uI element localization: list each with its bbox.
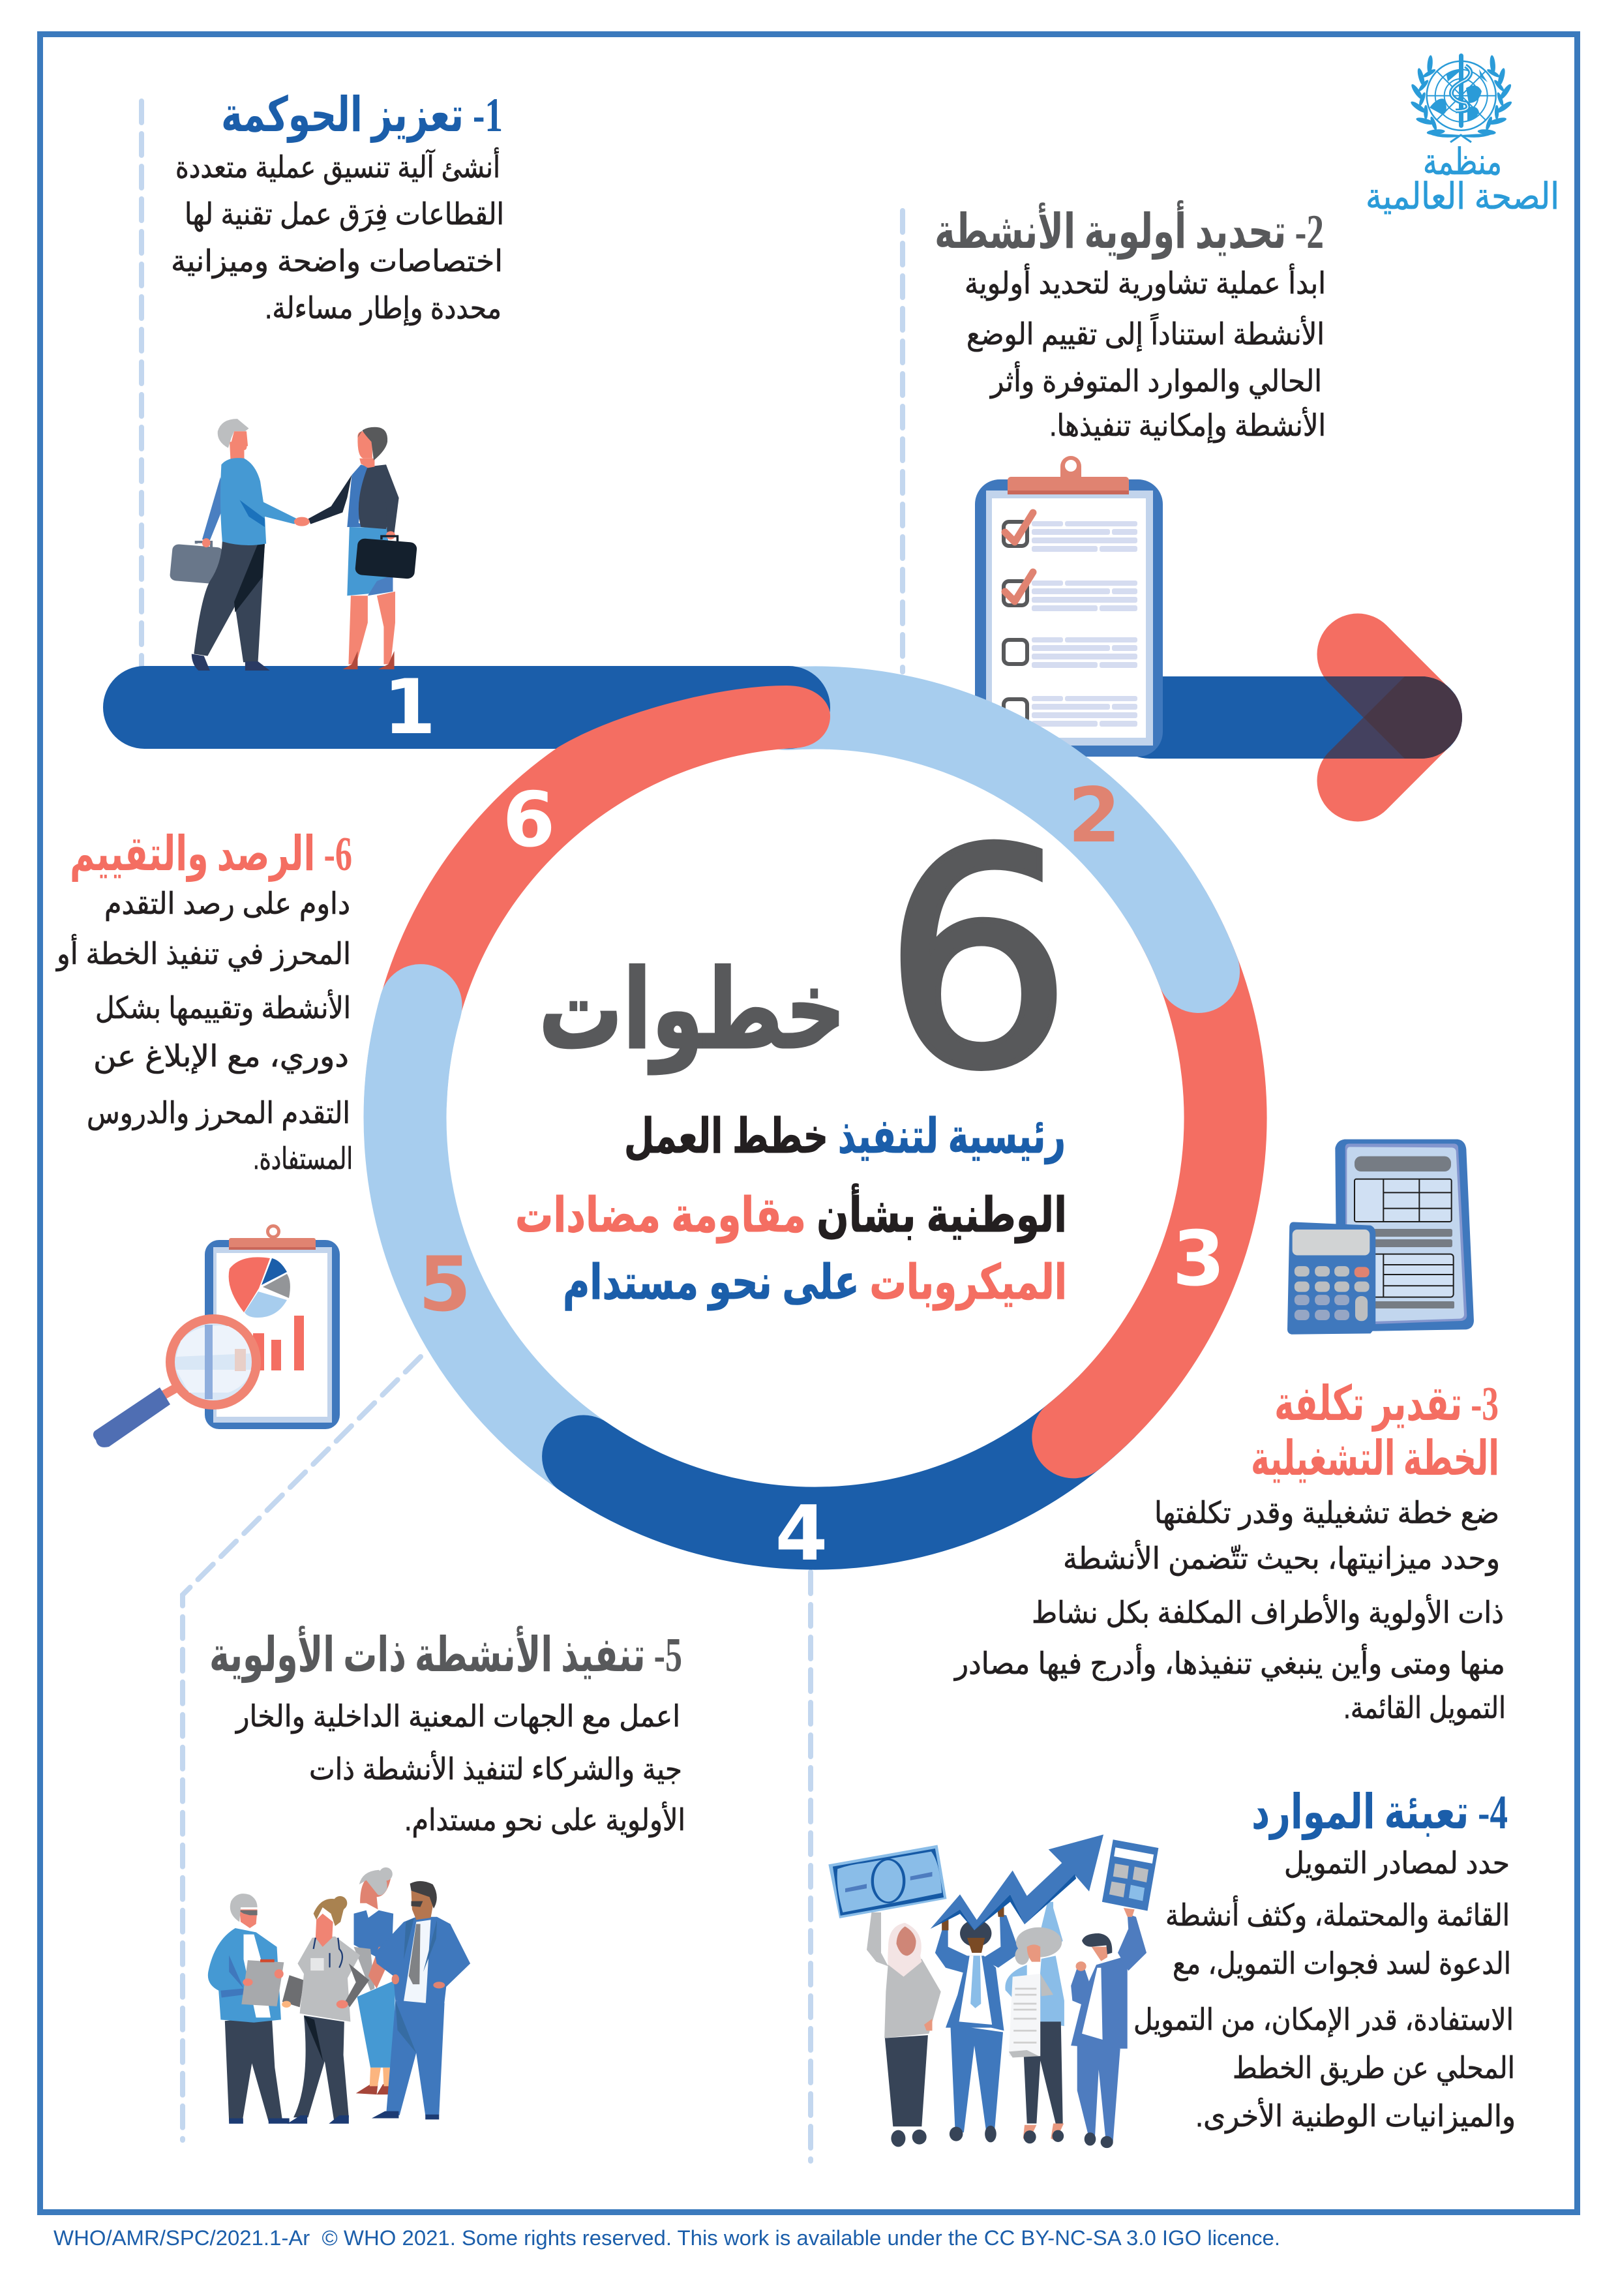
text step 4: القائمة والمحتملة، وكثف أنشطة xyxy=(1165,1896,1510,1933)
arrow head: chevron and shaft xyxy=(1109,654,1478,781)
circular ring with six segments xyxy=(103,666,1225,1528)
central title: word steps: خطوات xyxy=(539,948,846,1074)
text step 5: جية والشركاء لتنفيذ الأنشطة ذات xyxy=(309,1750,682,1787)
text step 2: الحالي والموارد المتوفرة وأثر xyxy=(989,361,1322,399)
text step 1: اختصاصات واضحة وميزانية xyxy=(171,244,503,279)
text step 3: منها ومتى وأين ينبغي تنفيذها، وأدرج فيها مصادر xyxy=(953,1644,1505,1682)
icon: report with pie chart and magnifier xyxy=(93,1226,340,1447)
text step 5 xyxy=(235,1699,685,1838)
text step 6: التقدم المحرز والدروس xyxy=(87,1096,350,1131)
text step 4: الاستفادة، قدر الإمكان، من التمويل xyxy=(1133,2002,1514,2038)
text step 6: الأنشطة وتقييمها بشكل xyxy=(95,989,351,1026)
text step 1: محددة وإطار مساءلة. xyxy=(265,291,502,326)
heading step 3: 3- تقدير تكلفة xyxy=(1274,1378,1499,1432)
text step 3: وحدد ميزانيتها، بحيث تتّضمن الأنشطة xyxy=(1063,1539,1500,1577)
text step 3 xyxy=(953,1496,1506,1726)
ring number 5: 5 xyxy=(419,1241,471,1329)
central subtitle: رئيسية لتنفيذ خطط العمل xyxy=(624,1109,1066,1164)
illustration: people raising money, growth arrow and calculator xyxy=(828,1834,1158,2148)
WHO logo: الصحة العالمية xyxy=(1366,175,1559,217)
text step 4: حدد لمصادر التمويل xyxy=(1284,1846,1510,1881)
ring number 4: 4 xyxy=(775,1490,828,1578)
panel: step 6 monitoring xyxy=(55,828,353,1447)
text step 2: الأنشطة وإمكانية تنفيذها. xyxy=(1049,406,1326,444)
panel: step 2 prioritization xyxy=(935,200,1326,444)
text step 3: التمويل القائمة. xyxy=(1343,1691,1506,1726)
ring number 6: 6 xyxy=(503,776,555,864)
text step 4: والميزانيات الوطنية الأخرى. xyxy=(1195,2097,1516,2134)
text step 1: القطاعات فِرَق عمل تقنية لها xyxy=(185,197,504,232)
WHO logo xyxy=(1366,53,1559,217)
text step 2: ابدأ عملية تشاورية لتحديد أولوية xyxy=(965,264,1326,301)
panel: step 5 implementation xyxy=(208,1625,685,2124)
central subtitle: الوطنية بشأن مقاومة مضادات xyxy=(515,1183,1067,1244)
icon: checklist clipboard xyxy=(975,456,1163,757)
heading step 2: 2- تحديد أولوية الأنشطة xyxy=(935,200,1324,260)
text step 6 xyxy=(55,886,353,1175)
illustration: team of four xyxy=(208,1867,470,2124)
text step 5: اعمل مع الجهات المعنية الداخلية والخار xyxy=(235,1699,680,1734)
text step 1 xyxy=(171,147,504,326)
icon: budget sheet and calculator xyxy=(1287,1140,1474,1335)
WHO name: منظمة xyxy=(1423,141,1502,182)
text step 6: المحرز في تنفيذ الخطة أو xyxy=(55,934,351,972)
panel: step 1 governance xyxy=(170,89,504,671)
central subtitle: الميكروبات على نحو مستدام xyxy=(563,1255,1067,1311)
central subtitle xyxy=(515,1109,1067,1311)
heading step 6: 6- الرصد والتقييم xyxy=(70,828,352,883)
central title: large six: 6 xyxy=(882,787,1073,1135)
text step 5: الأولوية على نحو مستدام. xyxy=(404,1801,685,1838)
heading step 5: 5- تنفيذ الأنشطة ذات الأولوية xyxy=(209,1625,682,1684)
heading step 4: 4- تعبئة الموارد xyxy=(1251,1786,1508,1841)
text step 4 xyxy=(1133,1846,1516,2134)
ring number 3: 3 xyxy=(1173,1215,1225,1303)
text step 4: الدعوة لسد فجوات التمويل، مع xyxy=(1173,1946,1511,1982)
ring number 1: 1 xyxy=(383,663,436,751)
WHO emblem xyxy=(1409,53,1513,142)
text step 4: المحلي عن طريق الخطط xyxy=(1233,2051,1515,2086)
illustration: handshake xyxy=(170,419,417,671)
footer credit line: WHO/AMR/SPC/2021.1-Ar © WHO 2021. Some rights reserved. This work is available under the CC BY-NC-SA 3.0 IGO licence. xyxy=(53,2226,1280,2250)
heading step 1: 1- تعزيز الحوكمة xyxy=(221,89,503,144)
heading step 3: الخطة التشغيلية xyxy=(1251,1432,1499,1486)
text step 2 xyxy=(965,264,1326,444)
text step 6: دوري، مع الإبلاغ عن xyxy=(93,1039,349,1074)
panel: step 4 resources xyxy=(828,1786,1516,2148)
text step 2: الأنشطة استناداً إلى تقييم الوضع xyxy=(966,313,1325,352)
text step 6: داوم على رصد التقدم xyxy=(104,886,350,922)
text step 3: ذات الأولوية والأطراف المكلفة بكل نشاط xyxy=(1032,1594,1504,1631)
text step 1: أنشئ آلية تنسيق عملية متعددة xyxy=(175,147,500,185)
text step 3: ضع خطة تشغيلية وقدر تكلفتها xyxy=(1154,1496,1499,1531)
text step 6: المستفادة. xyxy=(253,1141,353,1175)
heading step 3 xyxy=(1251,1378,1499,1486)
ring number 2: 2 xyxy=(1068,772,1120,860)
dashed connector lines xyxy=(142,101,903,2161)
panel: step 3 costing xyxy=(953,1140,1506,1726)
